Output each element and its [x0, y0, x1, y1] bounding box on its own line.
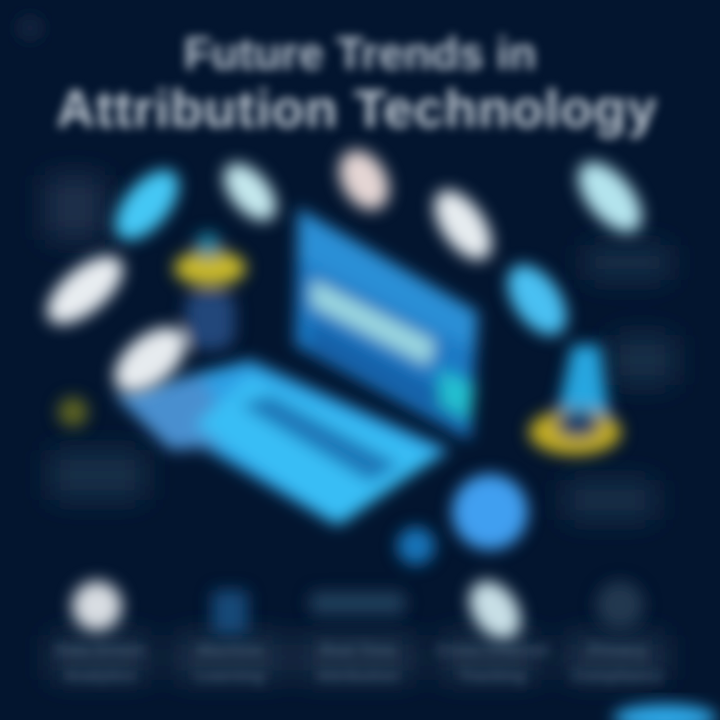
icon: pinkish	[329, 141, 399, 219]
icon: small olive	[58, 397, 88, 427]
bottom label 4	[436, 642, 550, 686]
bottom label 2: Machine	[198, 642, 262, 659]
bottom label 1: Analytics	[64, 668, 136, 685]
icon: cone with yellow base	[555, 345, 610, 425]
bottom label 1: Data Driven	[56, 642, 144, 659]
bottom label 4: Tracking	[460, 668, 525, 685]
bottom label 1	[55, 642, 144, 685]
floating icon leaves	[36, 141, 654, 649]
laptop keyboard	[115, 360, 450, 525]
icon: yellow band	[174, 250, 246, 286]
bottom label 2: Learning	[196, 668, 264, 685]
icon: left white	[36, 244, 134, 336]
bottom label 3	[317, 642, 399, 685]
laptop screen	[295, 208, 478, 440]
icon: left white lower	[102, 315, 198, 405]
icon: navy figure	[185, 290, 235, 350]
bottom label 5	[572, 642, 663, 685]
icon: top right	[566, 151, 654, 243]
bottom label 4: Cross Channel	[436, 642, 549, 659]
bottom icons	[72, 581, 122, 631]
label blocks	[45, 175, 675, 680]
bottom label 3: Attribution	[317, 668, 399, 685]
bottom label 3: Real Time	[320, 642, 396, 659]
bottom label 5: Privacy	[589, 642, 646, 659]
title: Attribution Technology	[56, 80, 658, 139]
title: Future Trends in	[184, 28, 536, 79]
icon: pale cyan	[214, 154, 286, 230]
bottom label 2	[196, 642, 265, 686]
icon: cyan top left	[103, 159, 191, 251]
icon: blue circle	[452, 474, 528, 550]
icon: right cyan	[495, 254, 579, 346]
icon: teal dome	[195, 232, 221, 258]
icon: white	[423, 180, 503, 270]
icon: small blue	[397, 527, 435, 565]
corner logo	[18, 16, 42, 40]
bottom label 5: Compliance	[572, 668, 663, 685]
title	[52, 28, 662, 146]
corner accent	[613, 704, 717, 720]
